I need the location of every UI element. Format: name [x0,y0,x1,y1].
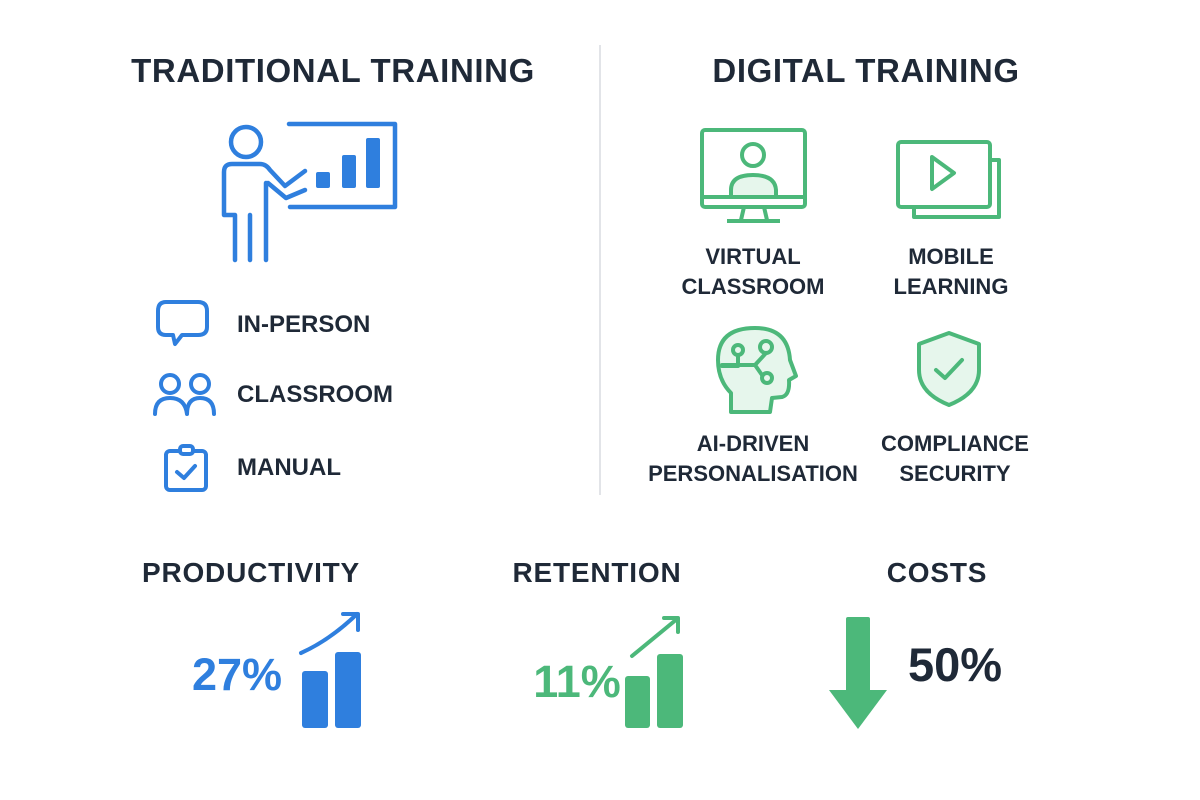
text: compliance security: COMPLIANCE [881,431,1029,456]
icon: AI head [718,328,796,412]
text: in-person: IN-PERSON [237,311,370,338]
stat: productivity 27%: 27% [192,649,282,700]
heading: productivity: PRODUCTIVITY [142,557,360,588]
chart: productivity bars with arrow [301,614,361,728]
icon: video play cards [898,142,999,217]
text: virtual classroom: CLASSROOM [682,274,824,299]
heading: retention: RETENTION [513,557,681,588]
icon: virtual classroom monitor [702,130,805,221]
icon: speech bubble [158,302,207,344]
text: classroom: CLASSROOM [237,381,393,408]
stat: costs 50%: 50% [908,638,1002,691]
icon: costs down arrow [829,617,887,729]
icon: clipboard [166,446,206,490]
icon: people [155,375,214,414]
title: traditional training: TRADITIONAL TRAINING [131,52,535,89]
text: ai-driven personalisation: AI-DRIVEN [697,431,809,456]
text: mobile learning: LEARNING [894,274,1008,299]
heading: costs: COSTS [887,557,987,588]
icon: presenter with board [224,124,395,260]
text: mobile learning: MOBILE [908,244,994,269]
text: ai-driven personalisation: PERSONALISATION [648,461,858,486]
stat: retention 11%: 11% [533,656,621,707]
text: virtual classroom: VIRTUAL [705,244,801,269]
title: digital training: DIGITAL TRAINING [712,52,1020,89]
text: manual: MANUAL [237,454,341,481]
text: compliance security: SECURITY [899,461,1011,486]
chart: retention bars with arrow [625,618,683,728]
icon: shield check [919,333,979,405]
